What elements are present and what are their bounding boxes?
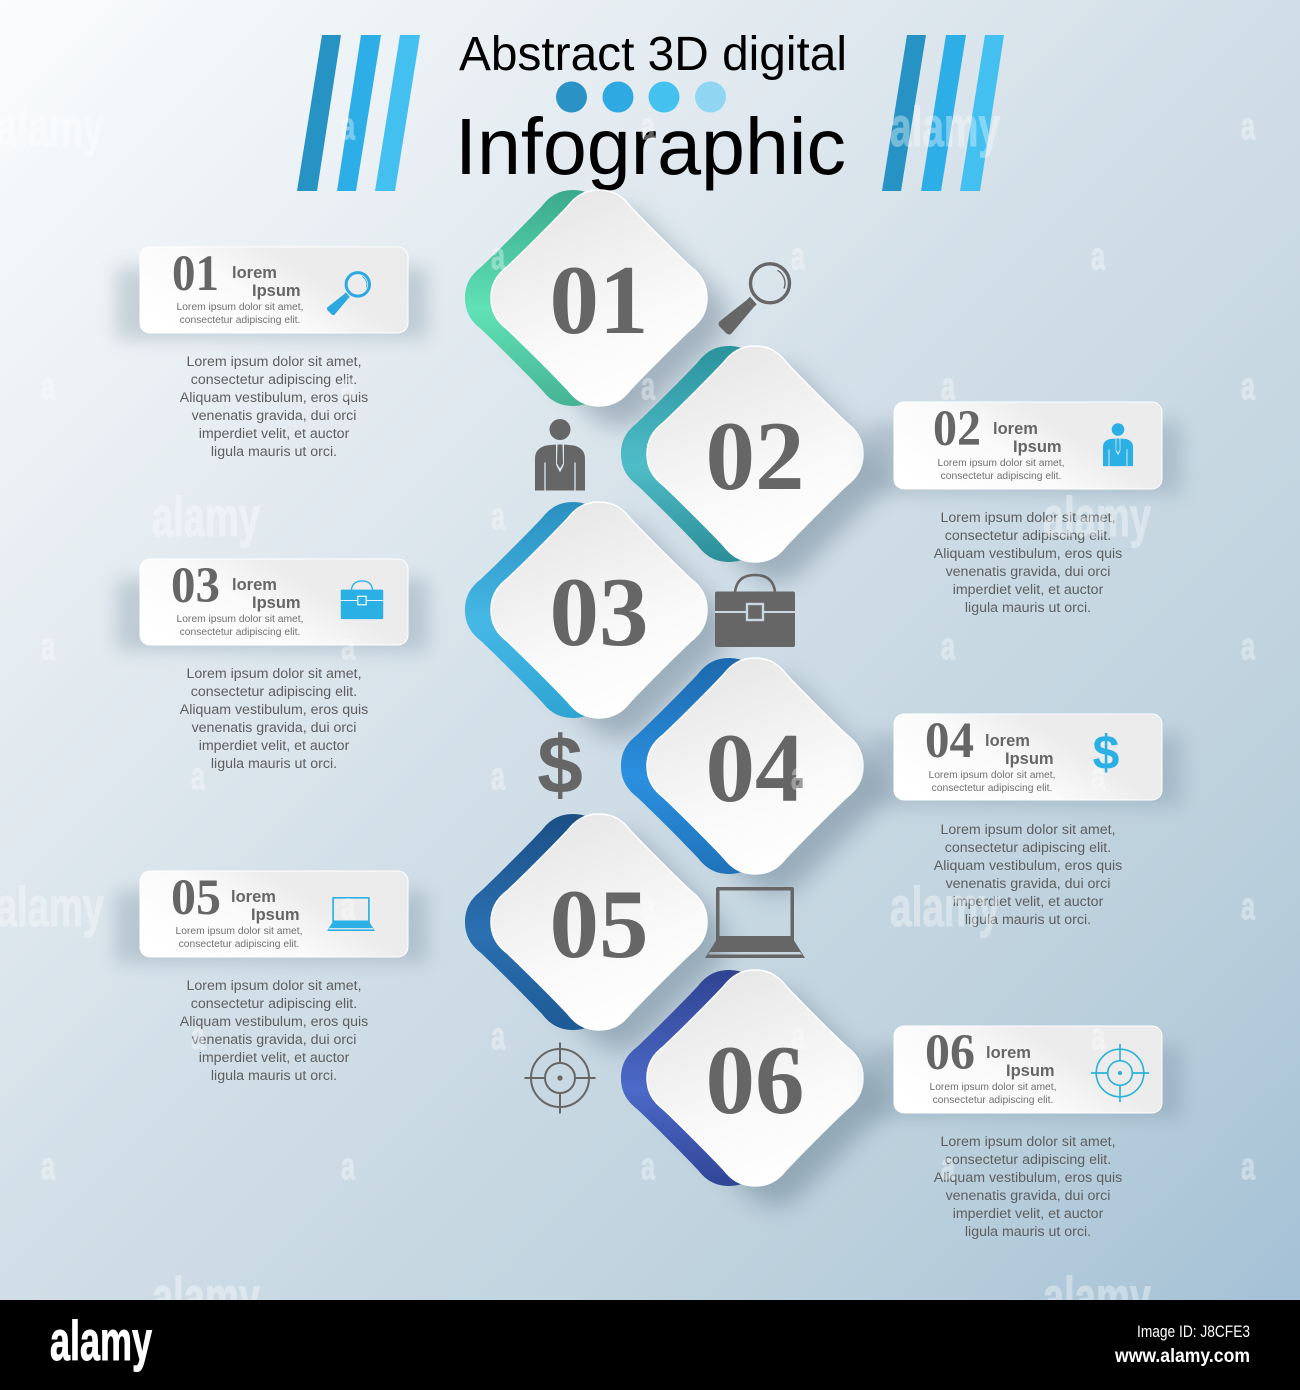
text block 06: Aliquam vestibulum, eros quis (934, 1170, 1122, 1186)
watermarks: a (41, 1146, 56, 1188)
watermarks: a (641, 1146, 656, 1188)
panel: card 03: consectetur adipiscing elit. (180, 627, 300, 638)
watermarks: a (791, 1016, 806, 1058)
watermarks: a (791, 236, 806, 278)
text block 02: consectetur adipiscing elit. (945, 528, 1111, 544)
panel: card 05: Ipsum (251, 906, 300, 924)
watermarks: a (341, 886, 356, 928)
watermarks: alamy (152, 1265, 260, 1328)
text block 05: consectetur adipiscing elit. (191, 996, 357, 1012)
text block 06: Lorem ipsum dolor sit amet, (940, 1134, 1116, 1150)
step 04 diamond: 04 (706, 714, 804, 823)
panel: card 03: lorem (232, 576, 277, 594)
watermarks: a (341, 106, 356, 148)
icon: briefcase (715, 575, 795, 647)
panel: card 06 (870, 1025, 1182, 1118)
panel: card 02: Ipsum (1013, 438, 1062, 456)
panel: card 06: lorem (986, 1044, 1031, 1062)
step 05 diamond (465, 814, 727, 1050)
watermarks: a (1241, 366, 1256, 408)
icon: person (535, 419, 585, 490)
decorative stripes right (882, 35, 1004, 191)
watermarks: alamy (890, 875, 1000, 938)
step 01 diamond: 01 (550, 246, 648, 355)
text block 02: Lorem ipsum dolor sit amet, (940, 510, 1116, 526)
text block 02: venenatis gravida, dui orci (946, 564, 1110, 580)
panel: card 04: 04 (925, 713, 974, 769)
text block 05 (180, 978, 368, 1084)
watermarks: a (791, 756, 806, 798)
panel: card 03 (116, 558, 428, 651)
watermarks: a (1241, 1146, 1256, 1188)
title main line: Infographic (455, 102, 846, 191)
step 03 diamond: 03 (550, 558, 648, 667)
text block 06 (934, 1134, 1122, 1240)
text block 03: Lorem ipsum dolor sit amet, (186, 666, 362, 682)
watermarks: a (341, 366, 356, 408)
text block 02: ligula mauris ut orci. (965, 600, 1091, 616)
decorative stripes left (297, 35, 420, 191)
panel: card 05: lorem (231, 888, 276, 906)
watermarks: a (1241, 106, 1256, 148)
text block 01: Aliquam vestibulum, eros quis (180, 390, 368, 406)
watermarks: a (941, 626, 956, 668)
panel: card 01: consectetur adipiscing elit. (180, 315, 300, 326)
watermarks: a (191, 756, 206, 798)
text block 01: venenatis gravida, dui orci (192, 408, 356, 424)
text block 03: Aliquam vestibulum, eros quis (180, 702, 368, 718)
text block 03: ligula mauris ut orci. (211, 756, 337, 772)
watermarks: a (1241, 886, 1256, 928)
watermarks: a (41, 626, 56, 668)
watermarks: a (1091, 756, 1106, 798)
watermarks: a (641, 366, 656, 408)
step 06 diamond: 06 (706, 1026, 804, 1135)
panel: card 05 (116, 870, 428, 963)
step 01 diamond (465, 190, 727, 426)
text block 01 (180, 354, 368, 460)
panel: card 03: Ipsum (252, 594, 301, 612)
icon: target (524, 1042, 596, 1114)
panel: card 03: 03 (171, 558, 220, 614)
text block 04: Lorem ipsum dolor sit amet, (940, 822, 1116, 838)
footer bar (0, 1300, 1300, 1390)
image id: Image ID: J8CFE3 (1137, 1322, 1250, 1341)
watermarks: a (491, 756, 506, 798)
watermarks: alamy (1043, 485, 1151, 548)
panel: card 05: Lorem ipsum dolor sit amet, (175, 926, 303, 937)
panel: card 04: lorem (985, 732, 1030, 750)
watermarks: a (341, 626, 356, 668)
watermarks: a (941, 1146, 956, 1188)
step 06 diamond (621, 970, 883, 1206)
panel: card 04 (870, 713, 1182, 806)
text block 04: consectetur adipiscing elit. (945, 840, 1111, 856)
text block 05: venenatis gravida, dui orci (192, 1032, 356, 1048)
panel: card 04: $ (1093, 727, 1120, 780)
step 05 diamond: 05 (550, 870, 648, 979)
panel: card 06: Lorem ipsum dolor sit amet, (929, 1082, 1057, 1093)
panel: card 03: Lorem ipsum dolor sit amet, (176, 614, 304, 625)
watermarks: alamy (1043, 1265, 1151, 1328)
text block 06: venenatis gravida, dui orci (946, 1188, 1110, 1204)
watermarks: a (941, 366, 956, 408)
panel: card 02: 02 (933, 401, 981, 457)
text block 04: ligula mauris ut orci. (965, 912, 1091, 928)
footer url: www.alamy.com (1114, 1346, 1250, 1367)
text block 05: Lorem ipsum dolor sit amet, (186, 978, 362, 994)
text block 06: ligula mauris ut orci. (965, 1224, 1091, 1240)
text block 03: imperdiet velit, et auctor (199, 738, 350, 754)
title top line: Abstract 3D digital (459, 28, 847, 81)
text block 04 (934, 822, 1122, 928)
text block 03 (180, 666, 368, 772)
text block 04: Aliquam vestibulum, eros quis (934, 858, 1122, 874)
watermarks: a (1241, 626, 1256, 668)
text block 03: venenatis gravida, dui orci (192, 720, 356, 736)
watermarks: a (1091, 236, 1106, 278)
text block 04: venenatis gravida, dui orci (946, 876, 1110, 892)
text block 02: Aliquam vestibulum, eros quis (934, 546, 1122, 562)
text block 01: Lorem ipsum dolor sit amet, (186, 354, 362, 370)
panel: card 04: Ipsum (1005, 750, 1054, 768)
watermarks: a (1091, 1016, 1106, 1058)
panel: card 04: consectetur adipiscing elit. (932, 783, 1052, 794)
panel: card 06: Ipsum (1006, 1062, 1055, 1080)
watermarks: a (341, 1146, 356, 1188)
panel: card 02: Lorem ipsum dolor sit amet, (937, 458, 1065, 469)
watermarks: a (641, 106, 656, 148)
watermarks: a (641, 886, 656, 928)
text block 01: consectetur adipiscing elit. (191, 372, 357, 388)
panel: card 02: lorem (993, 420, 1038, 438)
panel: card 01: Lorem ipsum dolor sit amet, (176, 302, 304, 313)
panel: card 05: 05 (171, 870, 221, 926)
panel: card 02: consectetur adipiscing elit. (941, 471, 1061, 482)
step 02 diamond: 02 (706, 402, 804, 511)
watermarks: a (491, 496, 506, 538)
text block 06: imperdiet velit, et auctor (953, 1206, 1104, 1222)
text block 03: consectetur adipiscing elit. (191, 684, 357, 700)
icon: laptop (705, 887, 805, 958)
watermarks: a (491, 1016, 506, 1058)
watermarks: a (191, 1016, 206, 1058)
text block 06: consectetur adipiscing elit. (945, 1152, 1111, 1168)
panel: card 02 (870, 401, 1182, 494)
text block 01: imperdiet velit, et auctor (199, 426, 350, 442)
panel: card 04: Lorem ipsum dolor sit amet, (928, 770, 1056, 781)
icon: dollar: $ (537, 720, 583, 811)
text block 04: imperdiet velit, et auctor (953, 894, 1104, 910)
watermarks: alamy (0, 875, 104, 938)
text block 02 (934, 510, 1122, 616)
panel: card 01: lorem (232, 264, 277, 282)
icon: magnifier (718, 264, 790, 334)
watermarks: alamy (152, 485, 260, 548)
watermarks: alamy (890, 95, 1000, 158)
step 03 diamond (465, 502, 727, 738)
step 02 diamond (621, 346, 883, 582)
footer logo: alamy (50, 1309, 152, 1372)
text block 02: imperdiet velit, et auctor (953, 582, 1104, 598)
text block 01: ligula mauris ut orci. (211, 444, 337, 460)
watermarks: a (41, 366, 56, 408)
panel: card 01: 01 (172, 246, 219, 302)
panel: card 06: 06 (925, 1025, 975, 1081)
watermarks: alamy (0, 95, 104, 158)
panel: card 06: consectetur adipiscing elit. (933, 1095, 1053, 1106)
step 04 diamond (621, 658, 883, 894)
panel: card 01 (116, 246, 428, 339)
panel: card 05: consectetur adipiscing elit. (179, 939, 299, 950)
text block 05: ligula mauris ut orci. (211, 1068, 337, 1084)
watermarks: a (491, 236, 506, 278)
text block 05: imperdiet velit, et auctor (199, 1050, 350, 1066)
text block 05: Aliquam vestibulum, eros quis (180, 1014, 368, 1030)
four dots (556, 82, 726, 112)
panel: card 01: Ipsum (252, 282, 301, 300)
